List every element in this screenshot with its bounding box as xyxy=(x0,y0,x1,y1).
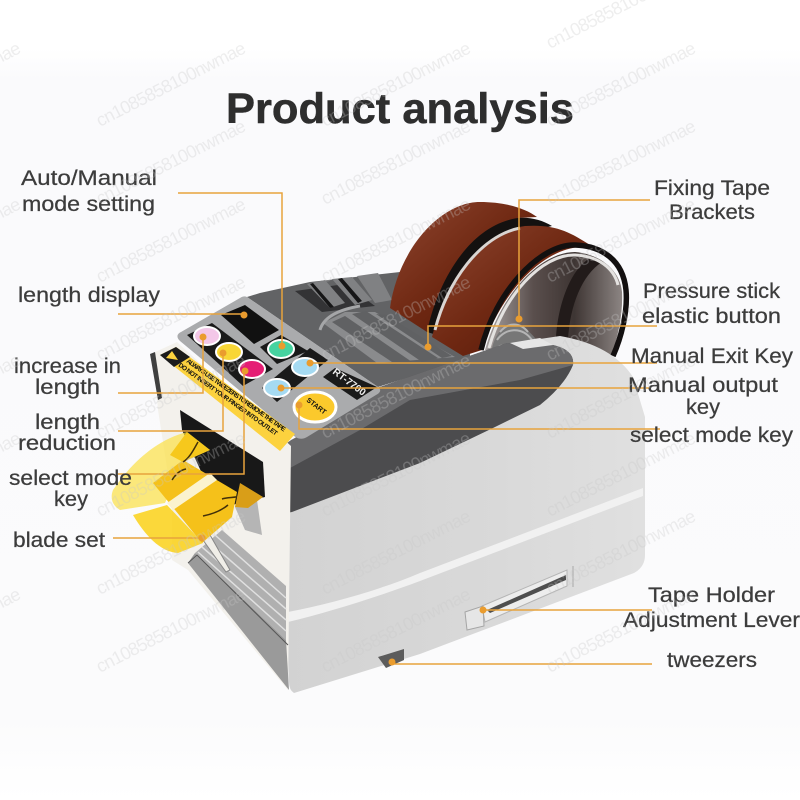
start button xyxy=(294,392,336,422)
label: increase in length xyxy=(14,355,121,399)
line: select mode key right xyxy=(299,405,660,429)
outlet opening xyxy=(180,410,265,505)
label: Manual output key: key xyxy=(686,396,721,419)
watermarks: cn1085858100nwmae xyxy=(318,38,474,131)
leader dots xyxy=(198,312,522,666)
top mechanism xyxy=(247,272,470,387)
yellow tape xyxy=(112,432,263,553)
watermarks xyxy=(0,0,699,677)
line: pressure stick xyxy=(428,326,657,347)
key blue upper xyxy=(292,358,318,376)
line: tweezers xyxy=(392,661,652,664)
model badge xyxy=(323,367,377,400)
right key strip xyxy=(262,348,328,402)
label: tweezers: tweezers xyxy=(667,649,757,672)
key magenta xyxy=(239,360,265,378)
watermarks: cn1085858100nwmae xyxy=(93,584,249,677)
key pink xyxy=(194,327,220,345)
label: length reduction xyxy=(18,411,116,455)
label: Manual output key xyxy=(628,374,778,419)
line: select mode key left xyxy=(118,371,244,474)
key blue lower xyxy=(264,379,290,397)
dark hood xyxy=(278,338,573,513)
front face xyxy=(153,342,291,690)
white rims xyxy=(489,255,618,348)
watermarks: cn1085858100nwmae xyxy=(93,428,249,521)
back roll xyxy=(390,202,537,332)
label: Auto/Manual mode setting xyxy=(21,167,157,216)
foot clip xyxy=(378,649,404,668)
watermarks: cn1085858100nwmae xyxy=(543,194,699,287)
watermarks: cn1085858100nwmae xyxy=(318,428,474,521)
label: length reduction: length xyxy=(35,411,100,434)
label: blade set: blade set xyxy=(13,529,105,552)
tape dispenser machine xyxy=(112,202,645,693)
watermarks: cn1085858100nwmae xyxy=(318,584,474,677)
label: Pressure stick elastic button: elastic button xyxy=(642,305,781,328)
label: increase in length: length xyxy=(35,376,100,399)
roll inner divider xyxy=(556,258,602,340)
watermarks: cn1085858100nwmae xyxy=(543,116,699,209)
start button: START xyxy=(305,397,328,417)
mode key strip xyxy=(260,335,308,364)
tape rolls xyxy=(390,202,626,356)
warning label: ALWAYS USE TWEEZERS TO REMOVE THE TAPE xyxy=(185,358,287,434)
label: Tape Holder Adjustment Lever xyxy=(623,584,800,632)
watermarks: cn1085858100nwmae xyxy=(318,116,474,209)
ribbed lower panel xyxy=(188,530,289,690)
right body xyxy=(280,336,645,693)
watermarks: cn1085858100nwmae xyxy=(318,272,474,365)
watermarks: cn1085858100nwmae xyxy=(93,194,249,287)
line: length display xyxy=(118,313,244,315)
label: select mode key right: select mode key xyxy=(630,424,794,447)
line: tape holder xyxy=(483,608,652,610)
warning label xyxy=(160,347,295,451)
label: select mode key xyxy=(9,467,132,511)
label: Fixing Tape Brackets: Brackets xyxy=(669,201,755,224)
line: increase in length xyxy=(118,337,203,393)
line: length reduction xyxy=(118,353,223,431)
label: Fixing Tape Brackets: Fixing Tape xyxy=(654,177,770,200)
watermarks: cn1085858100nwmae xyxy=(318,506,474,599)
watermarks: cn1085858100nwmae xyxy=(318,194,474,287)
warning label: DO NOT INSERT YOUR FINGER INTO OUTLET xyxy=(177,362,279,437)
line: fixing tape xyxy=(519,200,650,319)
label: Auto/Manual mode setting: mode setting xyxy=(22,193,155,216)
line: Auto/Manual xyxy=(178,193,282,346)
line: manual exit xyxy=(310,362,657,364)
left side edge xyxy=(150,352,162,400)
watermarks: cn1085858100nwmae xyxy=(543,350,699,443)
watermarks: cn1085858100nwmae xyxy=(543,38,699,131)
label: Fixing Tape Brackets xyxy=(654,177,770,224)
label: select mode key: select mode xyxy=(9,467,132,490)
watermarks: cn1085858100nwmae xyxy=(93,38,249,131)
label: Tape Holder Adjustment Lever: Adjustment Lever xyxy=(623,609,800,632)
roll interior xyxy=(485,252,622,355)
key green xyxy=(268,340,294,358)
line: manual output xyxy=(281,387,650,389)
black gap xyxy=(427,218,552,335)
leader lines xyxy=(113,193,660,664)
watermarks: cn1085858100nwmae xyxy=(543,506,699,599)
line: blade set xyxy=(113,537,202,539)
label: select mode key: key xyxy=(54,488,89,511)
tape holder slot xyxy=(465,566,573,630)
blade and bracket xyxy=(203,500,262,572)
watermarks: cn1085858100nwmae xyxy=(543,428,699,521)
title: Product analysis xyxy=(226,85,574,133)
label: Tape Holder Adjustment Lever: Tape Holder xyxy=(648,584,775,607)
spring arcs xyxy=(492,325,540,348)
watermarks: cn1085858100nwmae xyxy=(93,116,249,209)
label: increase in length: increase in xyxy=(14,355,121,378)
left key strip xyxy=(187,323,273,386)
light band xyxy=(288,488,643,622)
watermarks: cn1085858100nwmae xyxy=(93,350,249,443)
label: Manual output key: Manual output xyxy=(628,374,778,397)
label: Pressure stick elastic button xyxy=(642,280,781,328)
watermarks: cn1085858100nwmae xyxy=(543,584,699,677)
model badge: RT-7700 xyxy=(330,367,368,399)
label: Auto/Manual mode setting: Auto/Manual xyxy=(21,167,157,190)
label: length display: length display xyxy=(18,284,161,307)
watermarks: cn1085858100nwmae xyxy=(93,506,249,599)
watermarks: cn1085858100nwmae xyxy=(93,272,249,365)
front roll band xyxy=(432,226,590,356)
label: Manual Exit Key: Manual Exit Key xyxy=(631,345,794,368)
watermarks: cn1085858100nwmae xyxy=(318,350,474,443)
panel base xyxy=(177,296,380,439)
length display xyxy=(221,305,279,344)
key yellow xyxy=(216,343,242,361)
outer black rim xyxy=(481,245,626,356)
label: length reduction: reduction xyxy=(18,432,116,455)
panel xyxy=(177,296,380,439)
label: Pressure stick elastic button: Pressure stick xyxy=(643,280,781,303)
watermarks: cn1085858100nwmae xyxy=(543,272,699,365)
